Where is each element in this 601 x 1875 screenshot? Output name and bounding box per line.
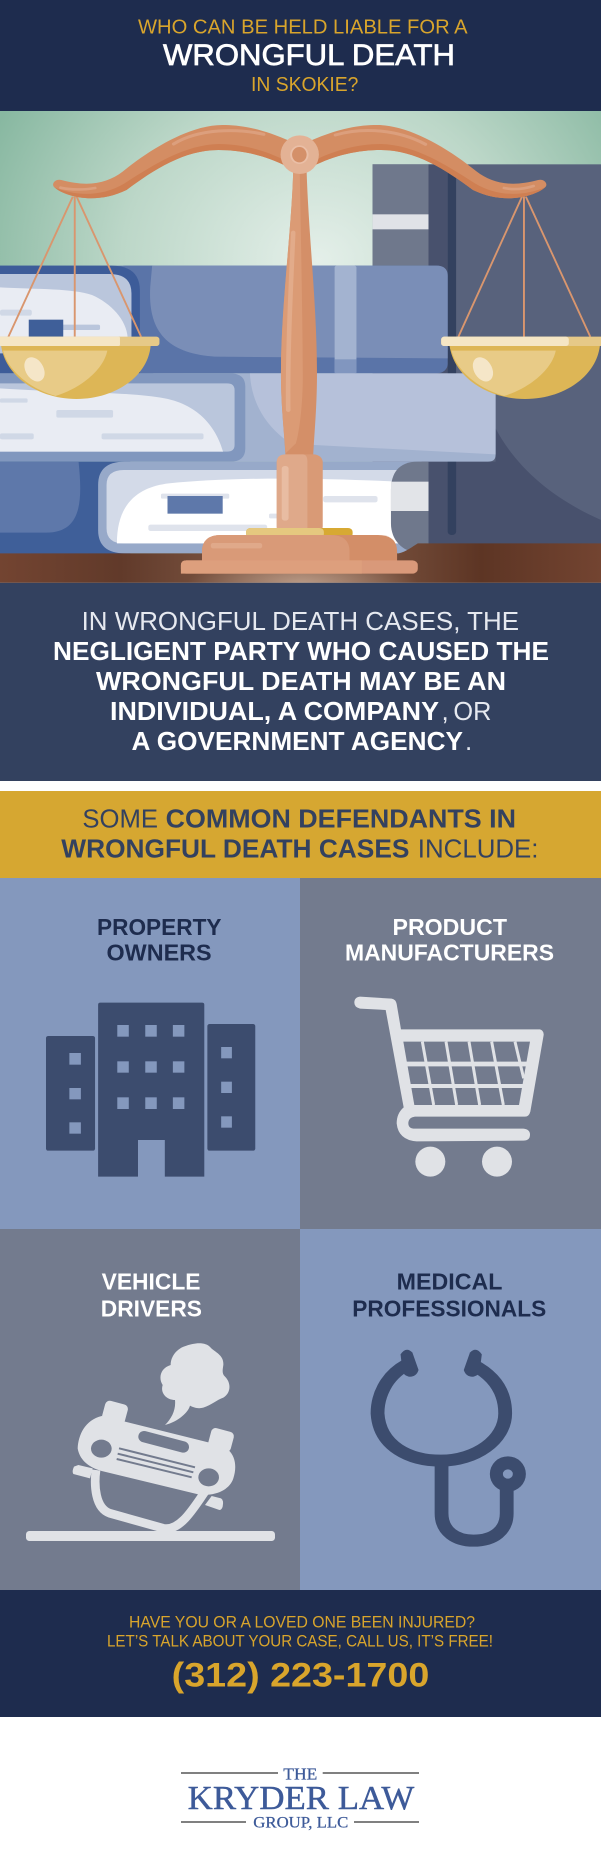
- scale hub: [281, 135, 319, 174]
- heading: medical professionals: [352, 1269, 546, 1322]
- gold heading band: [0, 791, 601, 878]
- top blue book: [0, 266, 448, 373]
- statement line 2: NEGLIGENT PARTY WHO CAUSED THE: [53, 636, 549, 666]
- right pan: [441, 337, 601, 399]
- statement line 4: ,: [442, 696, 449, 726]
- heading: product manufacturers: [345, 914, 554, 966]
- left pan: [0, 337, 159, 399]
- heading: product manufacturers: MANUFACTURERS: [345, 940, 554, 966]
- heading line 2: WRONGFUL DEATH CASES: [61, 836, 409, 864]
- panel: product manufacturers: [300, 878, 601, 1229]
- heading: vehicle drivers: [101, 1269, 202, 1322]
- statement line 4: OR: [453, 696, 491, 726]
- heading line 1: COMMON DEFENDANTS IN: [166, 806, 516, 834]
- panel: vehicle drivers: [0, 1229, 300, 1590]
- heading: property owners: [97, 914, 222, 966]
- logo: the kryder law group: GROUP, LLC: [253, 1815, 348, 1832]
- heading: property owners: OWNERS: [106, 940, 212, 966]
- statement line 4: INDIVIDUAL, A COMPANY: [110, 696, 439, 726]
- heading: medical professionals: MEDICAL: [397, 1269, 503, 1295]
- header line 3: IN SKOKIE?: [251, 74, 358, 96]
- call to action band: [0, 1590, 601, 1717]
- title: wrongful death: WRONGFUL DEATH: [163, 39, 455, 72]
- header band: [0, 0, 601, 111]
- icon: office buildings: [46, 1003, 255, 1177]
- heading: property owners: PROPERTY: [97, 914, 222, 940]
- scale column: [281, 172, 317, 457]
- statement line 5: A GOVERNMENT AGENCY: [132, 726, 463, 756]
- panel: property owners: [0, 878, 300, 1229]
- heading: product manufacturers: PRODUCT: [392, 914, 507, 940]
- bottom book: [0, 462, 429, 555]
- phone number: (312) 223-1700: [172, 1657, 429, 1695]
- heading line 1: SOME: [82, 806, 158, 834]
- scale beam: [53, 125, 546, 198]
- scale strings: [8, 197, 590, 337]
- call to action line 2: LET’S TALK ABOUT YOUR CASE, CALL US, IT’S FREE!: [107, 1631, 493, 1650]
- heading: vehicle drivers: VEHICLE: [102, 1269, 200, 1295]
- logo: the kryder law group: KRYDER LAW: [188, 1780, 414, 1817]
- icon: shopping cart: [354, 997, 544, 1177]
- illustration: scales of justice and law books: [0, 111, 601, 584]
- upright dark book: [373, 164, 601, 544]
- call to action line 1: HAVE YOU OR A LOVED ONE BEEN INJURED?: [129, 1612, 475, 1631]
- statement line 5: .: [465, 726, 472, 756]
- heading: medical professionals: PROFESSIONALS: [352, 1296, 546, 1322]
- icon: stethoscope: [378, 1350, 526, 1541]
- icon: overturned car with smoke: [26, 1343, 275, 1541]
- scale base: [181, 454, 418, 574]
- table: [0, 543, 601, 584]
- heading line 2: INCLUDE:: [418, 836, 538, 864]
- heading: vehicle drivers: DRIVERS: [101, 1296, 202, 1322]
- logo: the kryder law group: [181, 1764, 419, 1832]
- statement line 1: IN WRONGFUL DEATH CASES, THE: [82, 606, 519, 636]
- header line 1: WHO CAN BE HELD LIABLE FOR A: [138, 17, 468, 39]
- statement panel: [0, 583, 601, 781]
- panel: medical professionals: [300, 1229, 601, 1590]
- middle book: [0, 373, 496, 462]
- logo: the kryder law group: THE: [283, 1764, 317, 1783]
- statement line 3: WRONGFUL DEATH MAY BE AN: [96, 666, 506, 696]
